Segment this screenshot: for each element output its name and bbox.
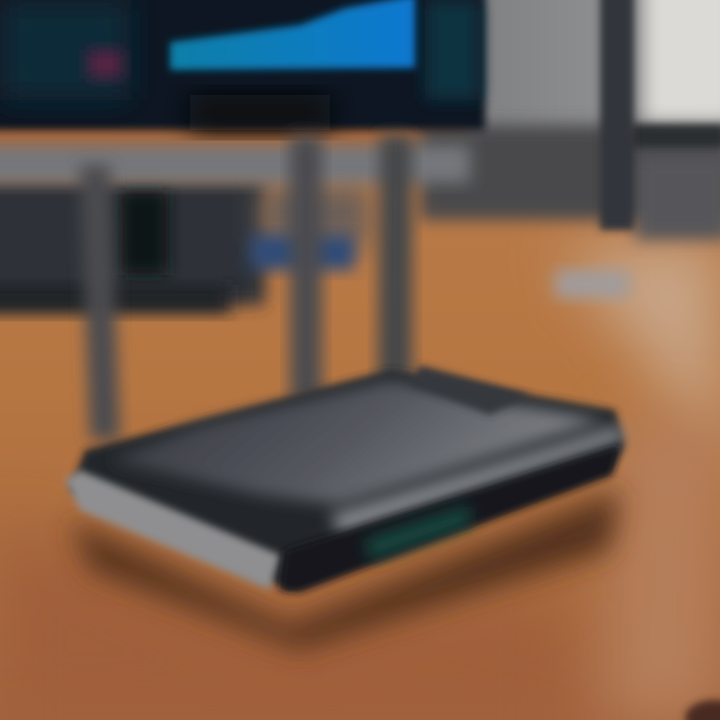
- router body: [70, 370, 625, 590]
- monitor: [0, 0, 485, 130]
- router top reflection: [410, 365, 530, 415]
- desk surface: [0, 170, 720, 720]
- corner object bottom right: [685, 700, 720, 720]
- antenna right: [378, 135, 412, 385]
- antenna middle: [290, 135, 322, 400]
- antenna left: [80, 165, 120, 440]
- router dark side with green light: [280, 445, 620, 592]
- desk shadow under router: [70, 490, 620, 650]
- router top face: [110, 380, 605, 505]
- router front edge left: [65, 470, 280, 590]
- small object on desk: [555, 270, 630, 298]
- background wall and window: [420, 0, 720, 240]
- monitor screen glow: [170, 0, 415, 70]
- router front edge right: [330, 425, 625, 535]
- desk equipment behind router: [0, 145, 470, 313]
- router: [65, 135, 625, 592]
